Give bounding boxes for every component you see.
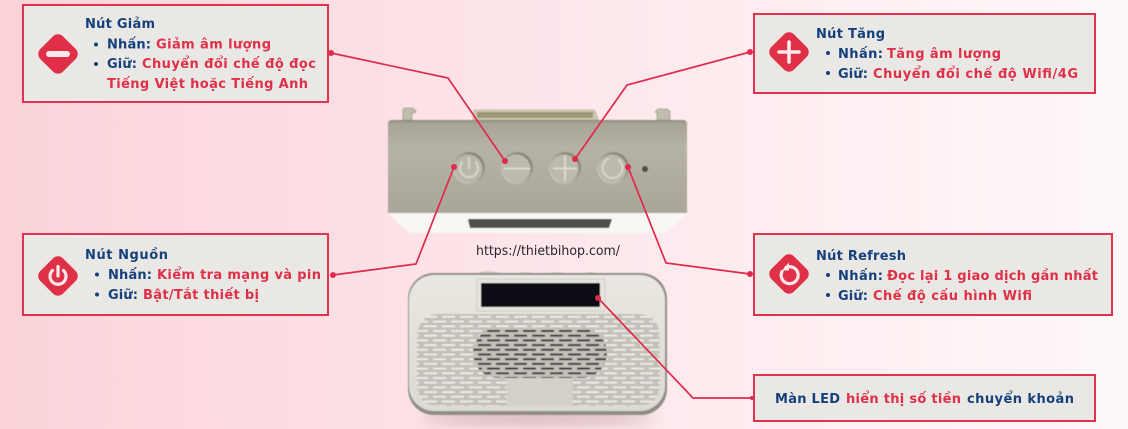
icon: plus [766,29,812,75]
list: minus actions: Giữ: [107,57,137,72]
connector: plus button [572,49,753,162]
list: minus actions [94,38,316,92]
list: refresh actions: Đọc lại 1 giao dịch gần nhất [887,269,1098,284]
top button nubs [476,271,608,274]
gray body [388,120,687,213]
label: led screen description: Màn LED [775,392,840,407]
plus button [549,152,581,184]
list: refresh actions: Chế độ cấu hình Wifi [873,289,1032,304]
list: power actions: Kiểm tra mạng và pin [157,267,321,283]
device: front view with display and speaker [408,271,667,425]
icon: power [35,253,81,299]
mounting clips and connector [403,108,670,120]
ground shadow [420,411,656,425]
panel: power button [23,234,328,315]
icon: minus [35,31,81,77]
label: led screen description: hiển thị số tiền [846,391,961,407]
power button [453,152,485,184]
list: refresh actions [826,269,1098,304]
connector: minus button [328,50,508,164]
url caption: https://thietbihop.com/ [476,244,621,259]
heading: nút refresh: Nút Refresh [816,249,906,264]
label: led screen description [775,391,1074,407]
list: power actions: Bật/Tắt thiết bị [143,288,259,303]
list: refresh actions: Nhấn: [838,269,883,284]
white lower strip with display slot [388,213,687,233]
panel: led screen [754,375,1095,421]
list: plus actions: Chuyển đổi chế độ Wifi/4G [873,66,1078,82]
list: minus actions: Nhấn: [107,38,151,52]
panel: plus button [754,14,1095,93]
list: plus actions: Giữ: [838,67,868,82]
list: plus actions: Tăng âm lượng [887,47,1001,62]
minus button [501,152,533,184]
list: minus actions: Tiếng Việt hoặc Tiếng Anh [107,77,308,92]
heading: nút tăng: Nút Tăng [816,27,885,42]
device: top view with buttons [388,108,687,233]
outer shell [408,273,667,415]
reset pinhole [642,166,648,172]
list: refresh actions: Giữ: [838,289,868,304]
connector: led screen [595,295,754,400]
connector: power button [330,164,457,278]
list: plus actions [826,47,1078,82]
label: led screen description: chuyển khoản [967,391,1074,407]
connector: refresh button [625,164,753,277]
heading: nút nguồn: Nút Nguồn [85,248,168,263]
list: power actions [95,267,321,303]
list: power actions: Giữ: [108,288,138,303]
list: minus actions: Giảm âm lượng [156,38,271,52]
refresh button [597,152,629,184]
icon: refresh [766,251,812,297]
heading: nút giảm: Nút Giảm [85,17,155,32]
list: plus actions: Nhấn: [838,47,883,62]
led display [477,279,605,311]
speaker grille [417,314,660,406]
panel: refresh button [754,234,1112,315]
panel: minus button [23,5,328,102]
list: power actions: Nhấn: [108,268,152,283]
list: minus actions: Chuyển đổi chế độ đọc [142,56,316,72]
